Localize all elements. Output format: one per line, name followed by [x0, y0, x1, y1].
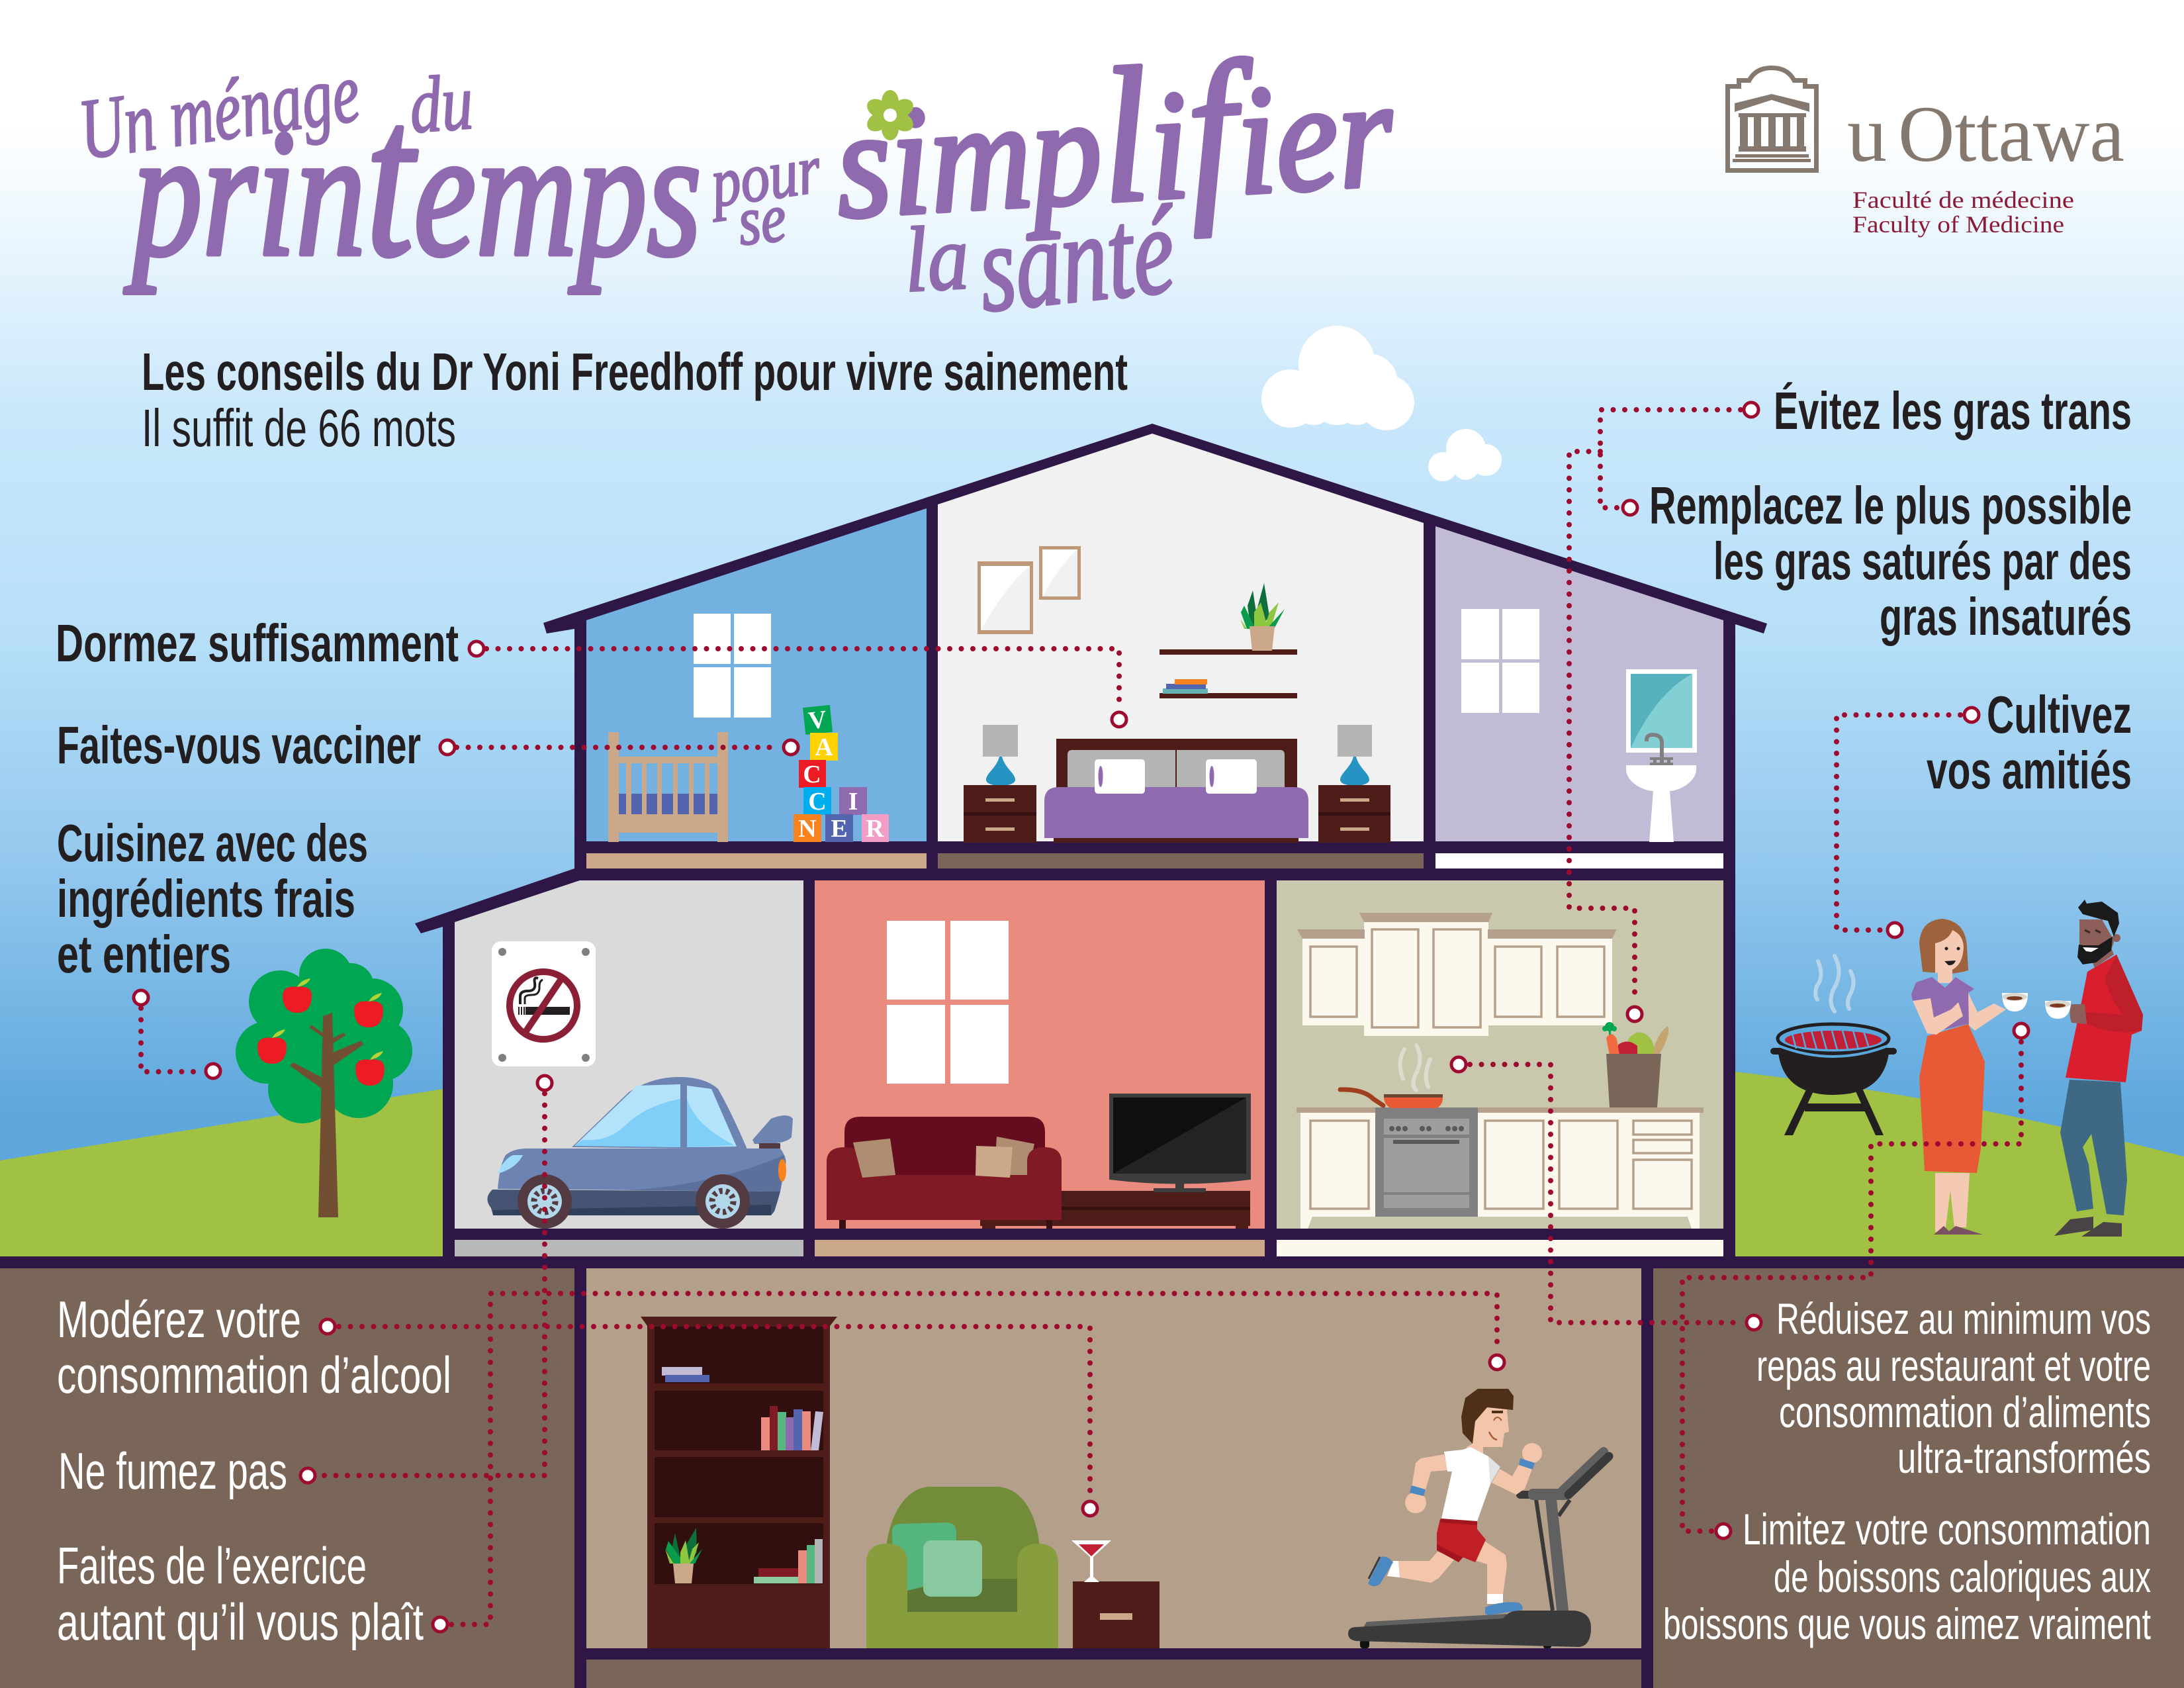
steam from pan — [1400, 1045, 1430, 1090]
tips left upper — [56, 614, 459, 984]
title word: pour: pour — [702, 130, 826, 222]
logo: uOttawa — [1727, 68, 2124, 238]
connector: gras saturés — [1569, 451, 1635, 1003]
window — [694, 614, 771, 718]
tips right lower — [1663, 1294, 2151, 1648]
title line: Un ménage: Un ménage — [73, 44, 365, 178]
tip: cook: Cuisinez avec des — [57, 814, 368, 872]
title word: se: se — [734, 178, 790, 260]
connector: Modérez alcool — [339, 1327, 1090, 1497]
tip: exercise: Faites de l’exercice — [57, 1536, 367, 1595]
faculty name English: Faculty of Medicine — [1852, 211, 2064, 238]
subtitle line 2: Il suffit de 66 mots — [142, 399, 456, 457]
mirror — [1626, 669, 1697, 753]
connector: gras trans — [1600, 410, 1741, 508]
treadmill — [1348, 1452, 1609, 1648]
cloud small — [1428, 429, 1502, 481]
connector: boissons — [1682, 1042, 2021, 1531]
tree — [236, 949, 412, 1217]
tip: alcohol — [57, 1290, 451, 1404]
foundation outer ground — [0, 1256, 2184, 1268]
room: bedroom — [938, 434, 1424, 843]
title word: simplifier: simplifier — [829, 13, 1399, 259]
nightstand and lamp right — [1318, 725, 1390, 843]
window — [887, 921, 1009, 1084]
armchair — [866, 1487, 1058, 1648]
man with coffee — [2045, 900, 2143, 1237]
connector: restaurant — [1470, 1064, 1743, 1323]
connector: Ne fumez pas — [319, 1094, 545, 1476]
tip: sleep: Dormez suffisamment — [56, 614, 459, 673]
title word: santé: santé — [972, 179, 1184, 339]
subtitle line 1: Les conseils du Dr Yoni Freedhoff pour vivre sainement — [142, 342, 1128, 401]
tip: restaurants — [1756, 1294, 2151, 1482]
faculty name French: Faculté de médecine — [1852, 187, 2074, 213]
television — [1109, 1094, 1251, 1192]
books on shelf — [1163, 679, 1208, 694]
cloud large — [1261, 326, 1414, 430]
tip: alcohol: Modérez votre — [57, 1290, 301, 1348]
tip: alcohol: consommation d’alcool — [57, 1346, 451, 1404]
martini glass — [1071, 1540, 1111, 1582]
connector: Dormez suffisamment — [486, 649, 1119, 708]
title word: printemps: printemps — [124, 54, 702, 303]
side table — [1073, 1581, 1160, 1648]
tip: exercise — [57, 1536, 424, 1651]
connector markers — [134, 402, 2028, 1632]
room: basement — [574, 1268, 1653, 1688]
floor strips upper — [586, 853, 1723, 868]
tip: cook: et entiers — [57, 925, 231, 984]
subtitle — [142, 342, 1128, 457]
woman with coffee — [1911, 919, 2028, 1235]
tip: friendships — [1927, 685, 2132, 800]
sofa — [827, 1117, 1062, 1229]
icon: university shield — [1727, 68, 1816, 171]
tv stand — [980, 1191, 1250, 1229]
barbecue grill — [1770, 956, 1897, 1135]
shelves — [1160, 649, 1297, 698]
basement outer soil — [0, 1268, 2184, 1688]
connector: Cuisinez — [141, 1008, 202, 1072]
room: living room — [815, 880, 1265, 1229]
wordmark: u — [1847, 90, 1887, 179]
icon: flower — [864, 90, 917, 140]
house structure lower — [415, 868, 1735, 1268]
green hills — [0, 1072, 2184, 1258]
bed — [1044, 739, 1308, 843]
blocks spelling VACCINER: C — [803, 761, 821, 788]
blocks spelling VACCINER: V — [807, 706, 828, 735]
wordmark: Ottawa — [1898, 90, 2124, 179]
nightstand and lamp left — [964, 725, 1036, 843]
blocks spelling VACCINER: N — [798, 815, 817, 843]
floor strips lower — [455, 1240, 1723, 1256]
sink and faucet — [1626, 735, 1696, 842]
room: kitchen — [1277, 880, 1723, 1229]
blocks spelling VACCINER: E — [831, 815, 848, 843]
blocks spelling VACCINER: I — [848, 788, 858, 816]
tip: friendships: Cultivez — [1987, 685, 2132, 744]
connector: Faites-vous vacciner — [457, 745, 781, 750]
sky background — [0, 0, 2184, 1268]
blocks spelling VACCINER — [794, 705, 889, 843]
title word: la: la — [902, 206, 971, 312]
potted plant — [1240, 583, 1285, 651]
wall frames — [978, 546, 1081, 634]
tip: exercise: autant qu’il vous plaît — [57, 1593, 424, 1651]
tips left lower — [57, 1290, 451, 1651]
tip: saturated fats — [1649, 476, 2132, 646]
grocery bag — [1602, 1022, 1668, 1107]
blocks spelling VACCINER: C — [808, 788, 827, 816]
tip: smoking: Ne fumez pas — [58, 1442, 287, 1500]
runner — [1368, 1389, 1542, 1615]
connector: Faites de l'exercice — [451, 1293, 1497, 1624]
tip: vaccines: Faites-vous vacciner — [57, 716, 421, 774]
room: bathroom — [1435, 526, 1723, 842]
title line: du: du — [407, 58, 476, 150]
room: garage — [455, 880, 803, 1229]
tip: cook — [57, 814, 368, 984]
lower cabinets — [1297, 1107, 1704, 1229]
room: nursery — [586, 508, 927, 843]
basement walls and floor — [574, 1268, 1653, 1688]
blocks spelling VACCINER: A — [815, 733, 833, 761]
house structure upper — [543, 424, 1767, 880]
title — [73, 13, 1399, 339]
connector: amitiés — [1837, 715, 1960, 930]
bookcase — [641, 1317, 837, 1648]
stove — [1375, 1107, 1478, 1217]
crib — [608, 732, 728, 842]
no smoking sign — [492, 941, 596, 1066]
blocks spelling VACCINER: R — [866, 815, 884, 843]
steam — [1815, 956, 1854, 1011]
tip: cook: ingrédients frais — [57, 869, 355, 928]
upper cabinets — [1297, 913, 1617, 1036]
window — [1461, 609, 1539, 713]
tips right upper — [1649, 381, 2132, 800]
car — [487, 1077, 793, 1229]
frying pan — [1340, 1090, 1443, 1108]
tip: caloric beverages — [1663, 1505, 2151, 1648]
